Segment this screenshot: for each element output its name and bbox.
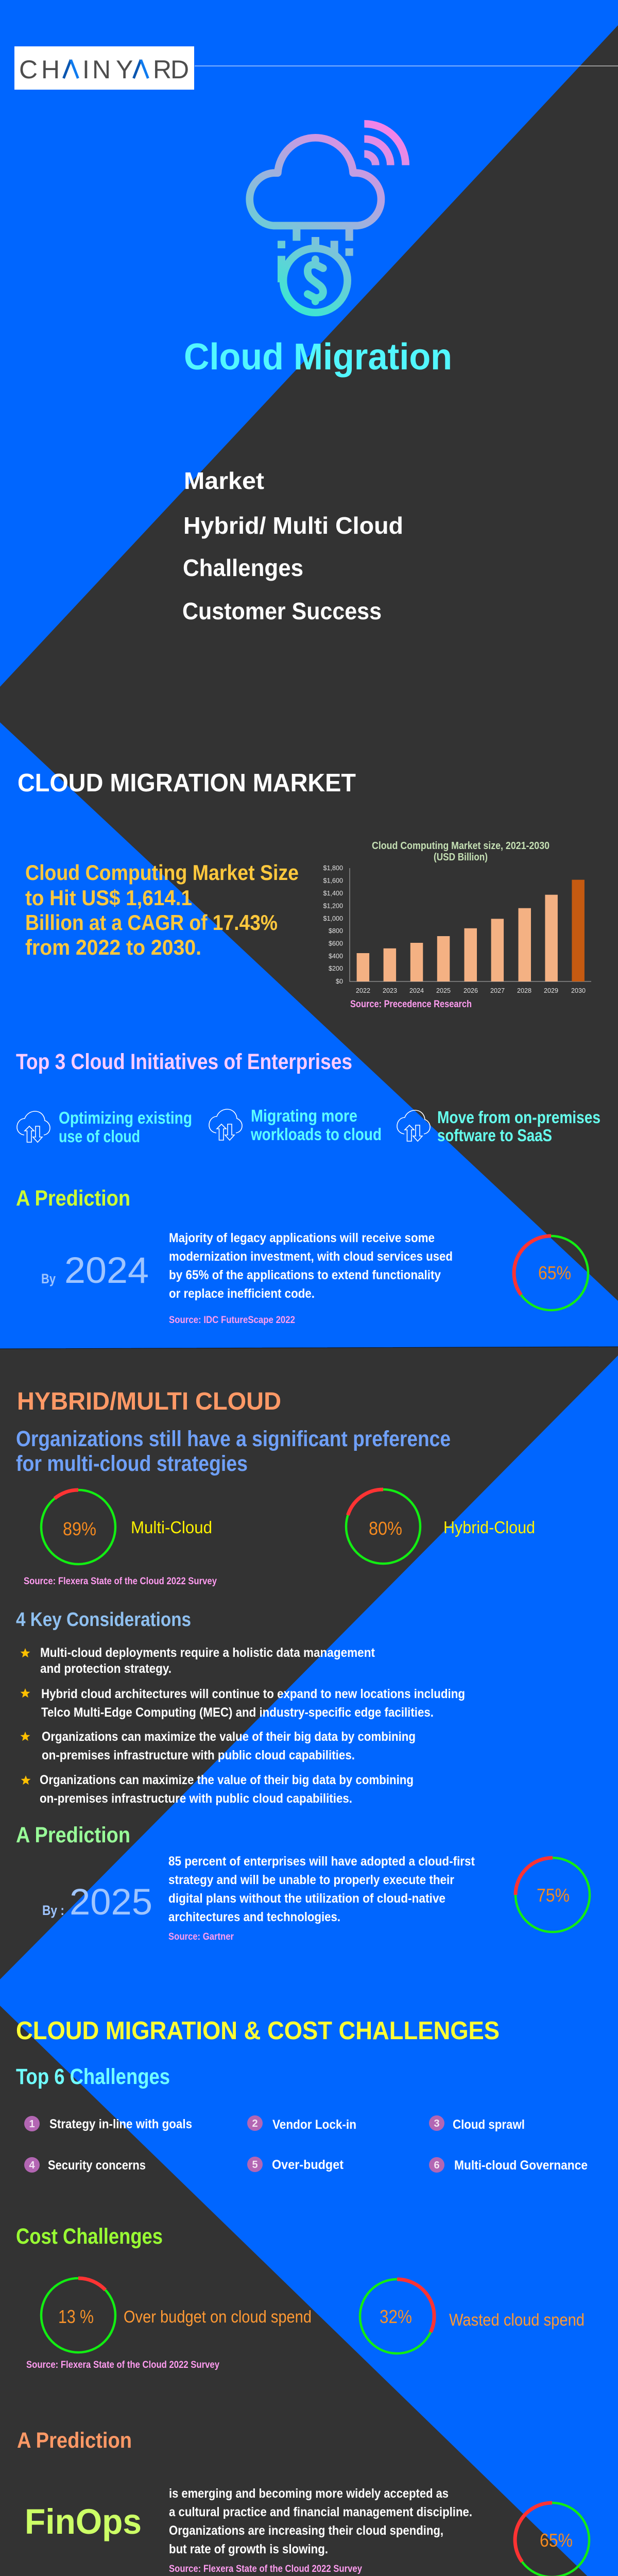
y axis labels: $1,000 [323,915,343,922]
chart title: (USD Billion) [434,852,488,863]
source: Flexera 2: Source: Flexera State of the Cloud 2022 Survey [26,2360,219,2370]
prediction 1 text: modernization investment, with cloud services used [169,1249,453,1264]
challenge labels: Strategy in-line with goals [49,2117,192,2131]
prediction 1 text: by 65% of the applications to extend functionality [169,1268,441,1282]
prediction 2 text: 85 percent of enterprises will have adopted a cloud-first [168,1854,475,1869]
initiative 1: Optimizing existing [59,1108,192,1127]
by 2024: 2024 [64,1250,149,1291]
challenge numbers: 3 [434,2118,440,2129]
prediction 1 text: or replace inefficient code. [169,1286,315,1301]
y axis labels: $1,600 [323,877,343,884]
chart title: Cloud Computing Market size, 2021-2030 [372,840,550,852]
y axis labels: $1,200 [323,903,343,910]
y axis labels: $800 [329,927,343,935]
heading: prediction 2: A Prediction [16,1823,130,1848]
bar chart: cloud computing market size [323,840,591,1010]
heading: 4 key considerations: 4 Key Considerations [16,1609,191,1631]
challenge labels [48,2117,588,2173]
consideration list [21,1646,465,1806]
FinOps: FinOps [25,2502,142,2541]
ring: 75% [516,1858,590,1932]
prediction 3 text [169,2486,472,2556]
prediction 2 text [168,1854,475,1924]
challenge labels: Multi-cloud Governance [454,2158,588,2173]
prediction 3 text: is emerging and becoming more widely accepted as [169,2486,449,2501]
consideration 1: Multi-cloud deployments require a holistic data management [40,1646,375,1660]
y axis labels: $600 [329,940,343,947]
prediction 2 text: architectures and technologies. [168,1910,340,1924]
x axis labels: 2027 [490,987,505,994]
source: Flexera 3: Source: Flexera State of the Cloud 2022 Survey [169,2564,362,2574]
ring: 65% finops [515,2503,589,2576]
prediction 2 text: digital plans without the utilization of cloud-native [168,1891,445,1906]
challenge labels: Over-budget [272,2158,344,2172]
market size callout: from 2022 to 2030. [25,935,201,959]
ring: 65% [514,1236,588,1310]
subheading: preference [16,1427,451,1476]
consideration 1 [21,1646,375,1676]
icon: cloud up/down [209,1109,242,1140]
challenge numbers: 4 [29,2160,35,2171]
consideration 3: on-premises infrastructure with public cloud capabilities. [42,1748,355,1762]
market size callout: to Hit US$ 1,614.1 [25,886,192,910]
heading: prediction 3: A Prediction [17,2428,132,2453]
contents list: Customer Success [182,598,382,624]
subheading: preference: for multi-cloud strategies [16,1451,248,1476]
chart source: Source: Precedence Research [350,999,472,1010]
initiative 1: use of cloud [59,1127,140,1146]
market size callout: Billion at a CAGR of 17.43% [25,910,278,935]
ring: 80% hybrid-cloud: Hybrid-Cloud [443,1518,535,1537]
ring: 65%: 65% [538,1262,571,1283]
icon: cloud up/down [17,1111,50,1142]
ring: 89% multi-cloud [41,1490,212,1564]
challenge badges [24,2115,444,2173]
source: IDC: Source: IDC FutureScape 2022 [169,1315,295,1326]
x axis labels: 2026 [464,987,478,994]
background: dark diagonal, intro and market sections [0,25,618,1301]
ring: 32% wasted: 32% [380,2306,412,2327]
challenge numbers: 6 [434,2160,440,2171]
y axis labels: $0 [336,978,343,985]
chart title [372,840,550,863]
consideration 2: Telco Multi-Edge Computing (MEC) and industry-specific edge facilities. [41,1705,434,1720]
x axis labels [356,987,586,994]
ring: 75%: 75% [537,1885,570,1906]
prediction 3 text: a cultural practice and financial management discipline. [169,2505,472,2519]
challenges list [24,2115,588,2173]
x axis labels: 2024 [409,987,424,994]
consideration 4: on-premises infrastructure with public cloud capabilities. [40,1791,352,1806]
x axis labels: 2028 [517,987,531,994]
consideration 2 [21,1687,465,1720]
ring: 32% wasted: Wasted cloud spend [449,2310,585,2329]
contents list [182,467,403,624]
by 2025: 2025 [70,1882,152,1923]
heading: cost challenges sub: Cost Challenges [16,2224,163,2249]
heading: top 6 challenges: Top 6 Challenges [16,2064,170,2089]
initiative 2: Migrating more [251,1106,357,1125]
initiative 3: software to SaaS [437,1126,552,1145]
challenge numbers: 2 [252,2118,258,2129]
background: dark diagonal, hybrid cloud section [0,1347,618,1979]
ring: 89% multi-cloud: 89% [63,1518,96,1539]
challenge labels: Vendor Lock-in [272,2117,356,2132]
contents list: Challenges [183,554,303,581]
bars [357,880,585,981]
ring: 13% over budget: 13 % [58,2306,94,2327]
consideration 3: Organizations can maximize the value of their big data by combining [42,1730,416,1744]
x axis labels: 2023 [383,987,397,994]
contents list: Hybrid/ Multi Cloud [183,512,403,539]
source: Flexera: Source: Flexera State of the Cloud 2022 Survey [24,1576,217,1587]
initiative 2: workloads to cloud [250,1125,382,1144]
y axis labels: $1,800 [323,865,343,872]
prediction 3 text: but rate of growth is slowing. [169,2542,328,2556]
x axis labels: 2029 [544,987,558,994]
ring: 80% hybrid-cloud [346,1489,535,1564]
y axis labels: $200 [329,965,343,972]
source: Gartner: Source: Gartner [168,1931,234,1942]
consideration 3 [21,1730,416,1762]
consideration 2: Hybrid cloud architectures will continue to expand to new locations including [41,1687,465,1701]
prediction 2 text: strategy and will be unable to properly execute their [168,1873,454,1887]
challenge numbers: 5 [252,2159,258,2171]
heading: hybrid multi cloud: HYBRID/MULTI CLOUD [17,1388,281,1415]
initiative 1 [17,1108,192,1146]
logo: Chainyard top [14,46,194,90]
market size callout: Cloud Computing Market Size [25,860,299,885]
ring: 13% over budget [41,2278,312,2352]
icon: cloud with dollar coin and signal [250,124,406,313]
logo: Chainyard top: CHAINYARD [19,55,189,84]
contents list: Market [184,467,264,494]
x axis labels: 2030 [571,987,586,994]
y axis labels: $1,400 [323,890,343,897]
y axis labels [323,865,343,985]
prediction 1 text: Majority of legacy applications will receive some [169,1231,435,1245]
by 2024: By [41,1271,56,1286]
y axis labels: $400 [329,953,343,960]
challenge labels: Cloud sprawl [453,2117,525,2132]
prediction 3 text: Organizations are increasing their cloud spending, [169,2523,443,2538]
background: dark diagonal, challenges section [0,2006,618,2576]
consideration 4: Organizations can maximize the value of their big data by combining [40,1773,414,1787]
x axis labels: 2022 [356,987,370,994]
ring: 65% finops: 65% [540,2530,573,2551]
challenge labels: Security concerns [48,2158,146,2173]
initiative 3 [397,1108,600,1145]
ring: 32% wasted [360,2279,585,2353]
initiative 2 [209,1106,382,1144]
ring: 89% multi-cloud: Multi-Cloud [131,1518,212,1537]
challenge numbers [29,2118,440,2171]
heading: cost challenges: CLOUD MIGRATION & COST CHALLENGES [16,2017,500,2045]
ring: 13% over budget: Over budget on cloud spend [124,2307,312,2326]
ring: 80% hybrid-cloud: 80% [369,1518,402,1539]
heading: cloud migration market: CLOUD MIGRATION MARKET [18,769,356,797]
title: Cloud Migration [184,336,452,378]
subheading: preference: Organizations still have a significant preference [16,1427,451,1451]
market size callout [25,860,299,959]
icon: cloud up/down [397,1110,430,1141]
heading: prediction 1: A Prediction [16,1186,130,1211]
prediction 1 text [169,1231,453,1301]
x axis labels: 2025 [436,987,451,994]
heading: top 3 initiatives: Top 3 Cloud Initiatives of Enterprises [16,1049,352,1074]
consideration 4 [21,1773,414,1806]
by 2025: By : [42,1903,64,1918]
consideration 1: and protection strategy. [40,1662,171,1676]
challenge numbers: 1 [29,2119,35,2130]
